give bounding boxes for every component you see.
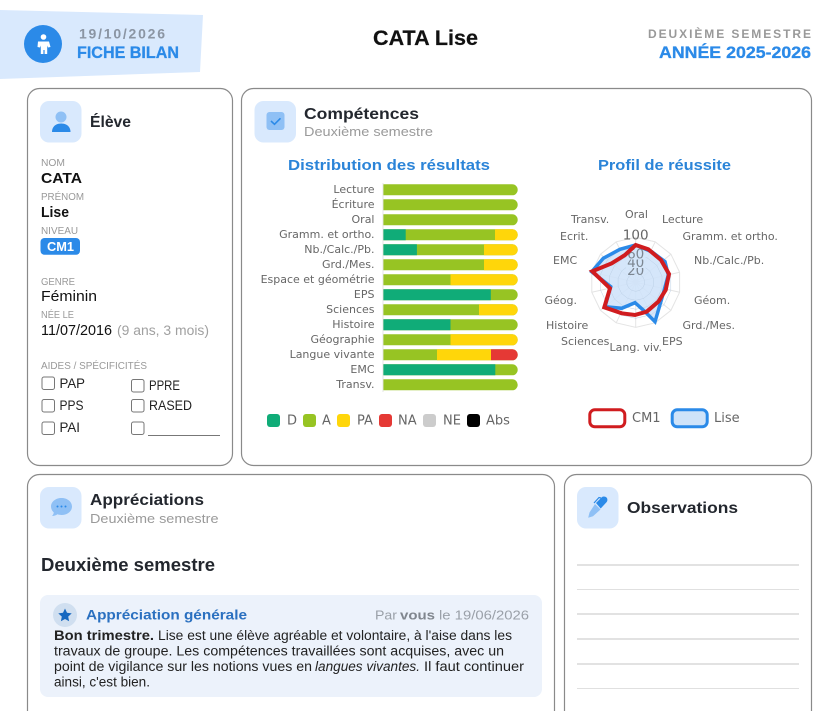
radar legend bbox=[590, 410, 740, 427]
bar labels: Lecture bbox=[333, 183, 375, 196]
bar labels: Langue vivante bbox=[290, 348, 375, 361]
icon: pen bbox=[577, 487, 618, 528]
bar labels: Géographie bbox=[310, 333, 375, 346]
bar chart legend: A bbox=[322, 414, 331, 428]
radar axis labels: EMC bbox=[553, 254, 577, 267]
bar labels: Écriture bbox=[332, 198, 375, 211]
header date: 19/10/2026 bbox=[79, 26, 165, 42]
panel: élève bbox=[28, 88, 232, 466]
student fields: PRÉNOM bbox=[41, 190, 84, 203]
bar labels: Nb./Calc./Pb. bbox=[304, 243, 374, 256]
bar labels: Grd./Mes. bbox=[322, 258, 374, 271]
radar tick labels: 20 bbox=[627, 263, 644, 279]
icon: person bbox=[40, 101, 82, 142]
bar labels: EMC bbox=[350, 363, 375, 376]
bar chart legend: Abs bbox=[486, 414, 510, 428]
card body text bbox=[54, 628, 525, 690]
icon: child bbox=[24, 25, 62, 63]
radar line: CM1 bbox=[592, 245, 669, 315]
radar axis labels: Transv. bbox=[570, 213, 609, 226]
student fields bbox=[40, 157, 209, 339]
bar labels: Histoire bbox=[332, 318, 375, 331]
aides et spécificités: RASED bbox=[149, 397, 192, 413]
student fields: (9 ans, 3 mois) bbox=[117, 323, 209, 338]
bar chart legend: PA bbox=[357, 414, 373, 428]
bar labels: Transv. bbox=[335, 378, 374, 391]
student fields: GENRE bbox=[41, 276, 75, 288]
student fields: NOM bbox=[41, 157, 65, 169]
icon: checkbox bbox=[254, 101, 296, 142]
bar labels: Sciences bbox=[326, 303, 375, 316]
card body text: ainsi, c'est bien. bbox=[54, 674, 150, 690]
bar labels: Oral bbox=[352, 213, 374, 226]
radar axis labels: Histoire bbox=[546, 319, 588, 332]
radar axis labels: Gramm. et ortho. bbox=[682, 230, 778, 243]
card body text: point de vigilance sur les notions vues en bbox=[54, 659, 312, 674]
student fields: NIVEAU bbox=[41, 225, 78, 237]
radar axis labels: EPS bbox=[662, 335, 683, 348]
header label: FICHE BILAN bbox=[77, 43, 179, 62]
panel: observations bbox=[564, 474, 812, 711]
radar chart: profil de réussite bbox=[544, 208, 778, 354]
bar chart legend: NE bbox=[443, 414, 461, 428]
radar axis labels: Lecture bbox=[662, 213, 703, 226]
bar chart legend: NA bbox=[398, 414, 417, 428]
chart title: distribution: Distribution des résultats bbox=[288, 157, 490, 174]
radar legend: Lise bbox=[714, 411, 740, 426]
bar chart: distribution bbox=[261, 183, 519, 392]
author and date: Par bbox=[375, 608, 398, 622]
subheading: Deuxième semestre bbox=[304, 124, 433, 139]
card: appréciation générale bbox=[40, 595, 542, 697]
radar axis labels bbox=[544, 208, 778, 354]
heading: compétences: Compétences bbox=[304, 106, 419, 123]
heading: élève: Élève bbox=[90, 114, 131, 131]
icon: star bbox=[53, 603, 77, 627]
aides et spécificités: PPRE bbox=[149, 377, 180, 393]
radar tick labels: 40 bbox=[627, 255, 644, 271]
header right: period bbox=[648, 26, 811, 62]
panel: compétences bbox=[242, 88, 812, 466]
bar chart legend bbox=[267, 414, 510, 428]
bar labels bbox=[261, 183, 375, 391]
radar axis labels: Sciences bbox=[561, 335, 610, 348]
student fields: 11/07/2016 bbox=[41, 322, 112, 339]
icon: speech bubble bbox=[40, 487, 82, 528]
radar line: Lise bbox=[592, 245, 668, 322]
radar axis labels: Géog. bbox=[544, 294, 577, 307]
radar inner rings bbox=[601, 246, 671, 318]
header ribbon bbox=[0, 10, 203, 79]
aides et spécificités: PAI bbox=[60, 419, 80, 435]
chart title: profil: Profil de réussite bbox=[598, 157, 731, 174]
badge: niveau: CM1 bbox=[47, 240, 74, 254]
radar axis labels: Géom. bbox=[694, 294, 730, 307]
student fields: NÉE LE bbox=[41, 308, 74, 321]
radar axis labels: Grd./Mes. bbox=[682, 319, 735, 332]
badge: niveau bbox=[40, 238, 80, 255]
radar axis labels: Oral bbox=[625, 208, 648, 221]
radar axis labels: Lang. viv. bbox=[610, 341, 662, 354]
aides et spécificités: PPS bbox=[60, 397, 84, 413]
author and date bbox=[375, 608, 529, 622]
card body text: travaux de groupe. Les compétences travaillées sont acquises, avec un bbox=[54, 644, 504, 658]
radar legend: CM1 bbox=[632, 411, 661, 426]
radar axis labels: Nb./Calc./Pb. bbox=[694, 254, 764, 267]
section heading: semester: Deuxième semestre bbox=[41, 555, 215, 575]
author and date: vous bbox=[400, 608, 435, 622]
title: student name: CATA Lise bbox=[373, 27, 478, 50]
radar tick labels bbox=[623, 228, 649, 279]
card body text: Bon trimestre. bbox=[54, 628, 154, 643]
header right: period: ANNÉE 2025-2026 bbox=[659, 43, 811, 62]
aides et spécificités: AIDES / SPÉCIFICITÉS bbox=[41, 359, 147, 372]
radar tick labels: 100 bbox=[623, 228, 649, 244]
writing lines bbox=[577, 565, 799, 688]
bar labels: Espace et géométrie bbox=[261, 273, 375, 286]
bar labels: Gramm. et ortho. bbox=[279, 228, 374, 241]
radar tick labels: 60 bbox=[627, 246, 644, 262]
card title: Appréciation générale bbox=[86, 606, 247, 622]
subheading: Deuxième semestre bbox=[90, 511, 218, 526]
student fields: CATA bbox=[41, 170, 82, 187]
card body text: Il faut continuer bbox=[424, 659, 525, 674]
radar area: Lise bbox=[592, 245, 668, 322]
bar chart legend: D bbox=[287, 414, 297, 428]
author and date: le 19/06/2026 bbox=[439, 608, 529, 622]
card body text: langues vivantes. bbox=[315, 659, 420, 674]
aides et spécificités: PAP bbox=[60, 375, 85, 391]
radar axis labels: Ecrit. bbox=[560, 230, 588, 243]
student fields: Lise bbox=[41, 204, 69, 221]
header right: period: DEUXIÈME SEMESTRE bbox=[648, 26, 811, 41]
heading: observations: Observations bbox=[627, 500, 738, 517]
panel: appréciations bbox=[28, 474, 554, 711]
aides et spécificités bbox=[41, 359, 220, 436]
card body text: Lise est une élève agréable et volontaire, à l'aise dans les bbox=[158, 628, 512, 643]
student fields: Féminin bbox=[41, 288, 97, 305]
heading: appréciations: Appréciations bbox=[90, 492, 204, 509]
bar labels: EPS bbox=[354, 288, 375, 301]
